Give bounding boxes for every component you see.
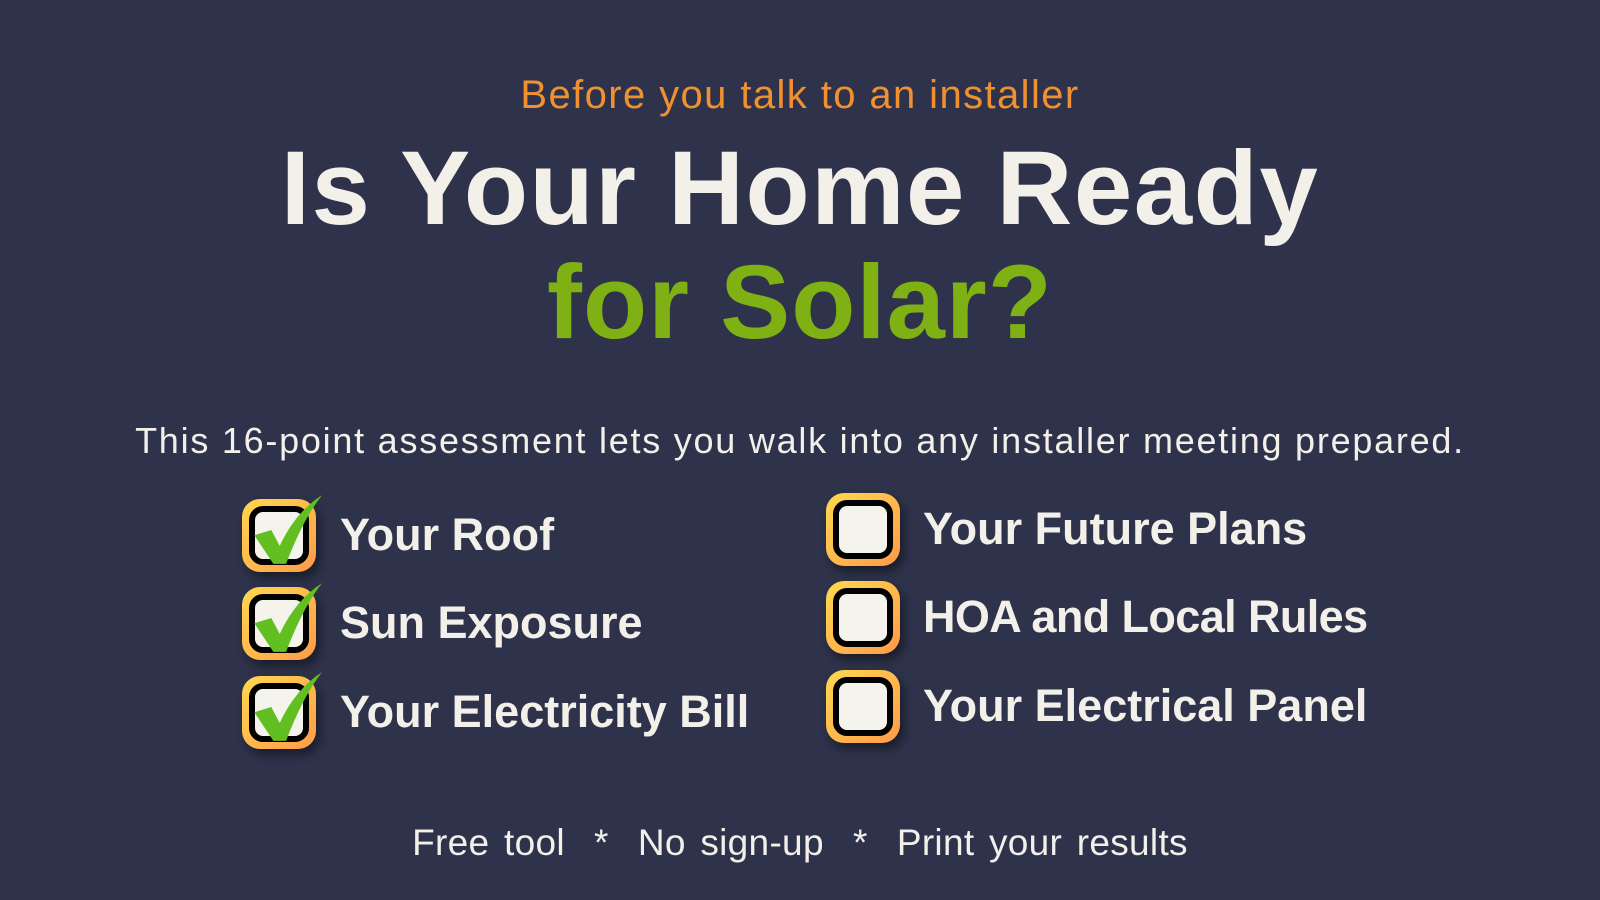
item: Sun Exposure (checked): Sun Exposure [340, 597, 643, 648]
footer tagline: Free tool * No sign-up * Print your results [412, 822, 1188, 863]
item: Your Electrical Panel: Your Electrical Panel [923, 680, 1367, 731]
item: Your Future Plans: Your Future Plans [923, 503, 1307, 554]
item: Your Electrical Panel [826, 670, 1367, 752]
description text: This 16-point assessment lets you walk into any installer meeting prepared. [135, 420, 1465, 461]
title line 2: for Solar? [547, 244, 1053, 361]
item: Your Electricity Bill (checked): Your Electricity Bill [340, 686, 749, 737]
item: HOA and Local Rules [826, 581, 1368, 664]
subtitle: Before you talk to an installer [520, 73, 1080, 117]
item: Your Electricity Bill (checked) [242, 672, 749, 758]
item: HOA and Local Rules: HOA and Local Rules [923, 591, 1368, 642]
checklist left column [242, 495, 749, 758]
item: Your Roof (checked) [242, 495, 554, 582]
title line 1: Is Your Home Ready [281, 130, 1319, 247]
item: Your Roof (checked): Your Roof [340, 509, 554, 560]
item: Your Future Plans [826, 493, 1307, 576]
checklist right column [826, 493, 1368, 752]
item: Sun Exposure (checked) [242, 583, 643, 670]
